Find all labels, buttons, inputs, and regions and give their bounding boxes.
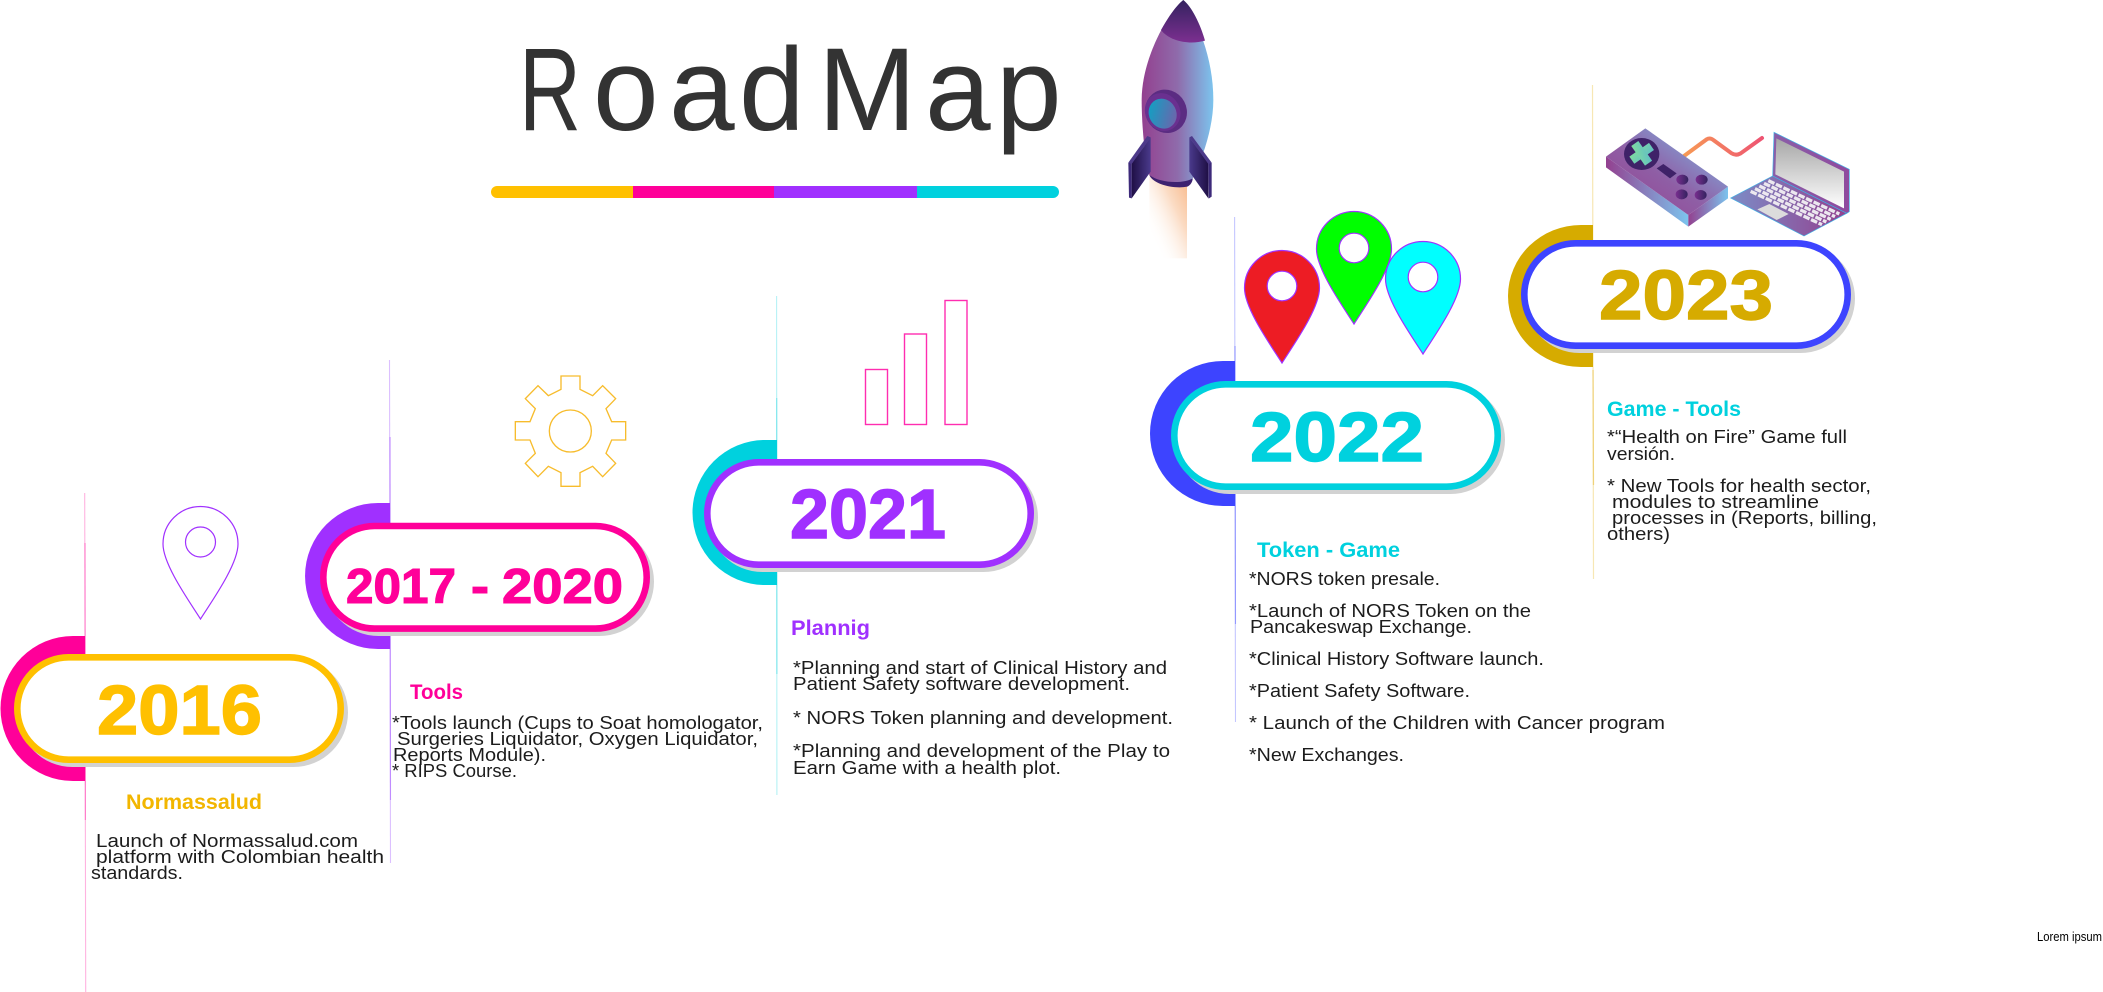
icon: game controller bbox=[1606, 128, 1728, 227]
text: 2017 - 2020 description: * RIPS Course. bbox=[392, 760, 517, 781]
text: 2021 description: Earn Game with a health plot. bbox=[793, 757, 1061, 778]
heading: Game - Tools: Game - Tools bbox=[1607, 398, 1741, 421]
year pill 2022 bbox=[1174, 384, 1505, 494]
text: 2023 description: *“Health on Fire” Game full bbox=[1607, 426, 1847, 447]
year pill 2023: 2023 bbox=[1599, 256, 1773, 334]
text: 2022 description: *NORS token presale. bbox=[1249, 568, 1440, 589]
timeline line 2023 bbox=[1592, 85, 1594, 579]
text: 2022 description: *Clinical History Software launch. bbox=[1249, 648, 1544, 669]
text: 2023 description: others) bbox=[1607, 523, 1670, 544]
text: 2021 description: *Planning and development of the Play to bbox=[793, 740, 1170, 761]
icon: rocket bbox=[1128, 0, 1213, 258]
year pill 2016: 2016 bbox=[97, 671, 262, 749]
year pill 2017 - 2020: - bbox=[471, 560, 489, 614]
icon: red pin bbox=[1244, 250, 1320, 363]
year pill 2022: 2022 bbox=[1250, 398, 1424, 476]
year pill 2023 bbox=[1524, 243, 1855, 353]
timeline line 2021 bbox=[776, 296, 778, 795]
text: 2017 - 2020 description: Surgeries Liquidator, Oxygen Liquidator, bbox=[397, 728, 758, 749]
panel: 2023 bbox=[1508, 85, 1877, 579]
icon: three coloured location pins bbox=[1244, 212, 1460, 363]
text: 2023 description: versión. bbox=[1607, 443, 1675, 464]
panel: 2022 bbox=[1150, 212, 1665, 765]
text: 2016 description: standards. bbox=[91, 862, 183, 883]
title: R bbox=[519, 24, 581, 156]
heading: Token - Game: Token - Game bbox=[1257, 539, 1400, 562]
icon: gear outline bbox=[515, 376, 626, 486]
timeline line 2016 bbox=[85, 493, 86, 992]
text: 2021 description: * NORS Token planning and development. bbox=[793, 707, 1173, 728]
half ring 2022 bbox=[1150, 361, 1235, 506]
text: 2023 description: modules to streamline bbox=[1612, 491, 1819, 512]
year pill 2017 - 2020: 2017 bbox=[346, 560, 456, 614]
title colour bar bbox=[491, 186, 1059, 198]
text: 2023 description: * New Tools for health sector, bbox=[1607, 475, 1871, 496]
text: 2017 - 2020 description: *Tools launch (Cups to Soat homologator, bbox=[392, 712, 763, 733]
icon: green pin bbox=[1316, 212, 1392, 324]
text: 2023 description bbox=[1607, 426, 1877, 544]
timeline line 2022 bbox=[1234, 217, 1236, 722]
text: 2016 description bbox=[91, 830, 384, 883]
year pill 2017 - 2020 bbox=[323, 526, 654, 636]
icon: connecting wire bbox=[1684, 138, 1762, 156]
text: 2021 description: *Planning and start of Clinical History and bbox=[793, 657, 1167, 678]
half ring 2023 bbox=[1508, 225, 1593, 367]
half ring 2021 bbox=[692, 440, 777, 585]
title: oadMap bbox=[593, 24, 1062, 156]
year pill 2016 bbox=[17, 657, 348, 767]
panel: 2017 - 2020 bbox=[305, 360, 763, 863]
year pill 2021 bbox=[707, 462, 1038, 572]
half ring 2017 bbox=[305, 503, 390, 649]
icon: laptop bbox=[1731, 132, 1849, 236]
icon: cyan pin bbox=[1386, 242, 1460, 354]
text: 2023 description: processes in (Reports, billing, bbox=[1612, 507, 1877, 528]
icon: game controller and laptop bbox=[1606, 128, 1849, 236]
text: 2021 description: Patient Safety software development. bbox=[793, 673, 1130, 694]
timeline line 2017 bbox=[390, 360, 391, 863]
text: 2017 - 2020 description bbox=[392, 712, 763, 781]
text: 2016 description: Launch of Normassalud.com bbox=[96, 830, 358, 851]
text: 2016 description: platform with Colombian health bbox=[96, 846, 384, 867]
heading: Tools: Tools bbox=[410, 681, 463, 704]
panel: 2016 bbox=[0, 493, 384, 992]
text: 2022 description: * Launch of the Children with Cancer program bbox=[1249, 712, 1665, 733]
icon: location pin outline bbox=[163, 506, 238, 619]
text: 2022 description: Pancakeswap Exchange. bbox=[1250, 616, 1472, 637]
text: 2022 description: *Launch of NORS Token on the bbox=[1249, 600, 1531, 621]
text: 2022 description: *New Exchanges. bbox=[1249, 744, 1404, 765]
half ring 2016 bbox=[0, 636, 85, 781]
heading: Normassalud: Normassalud bbox=[126, 791, 262, 814]
panel: 2021 bbox=[692, 296, 1173, 795]
text: 2022 description bbox=[1249, 568, 1665, 765]
text: 2022 description: *Patient Safety Software. bbox=[1249, 680, 1470, 701]
text: 2021 description bbox=[793, 657, 1173, 778]
text: 2017 - 2020 description: Reports Module). bbox=[393, 744, 546, 765]
icon: bar chart outline bbox=[866, 300, 967, 424]
year pill 2017 - 2020: 2020 bbox=[502, 560, 623, 614]
year pill 2021: 2021 bbox=[790, 475, 946, 553]
heading: Plannig: Plannig bbox=[791, 617, 870, 640]
